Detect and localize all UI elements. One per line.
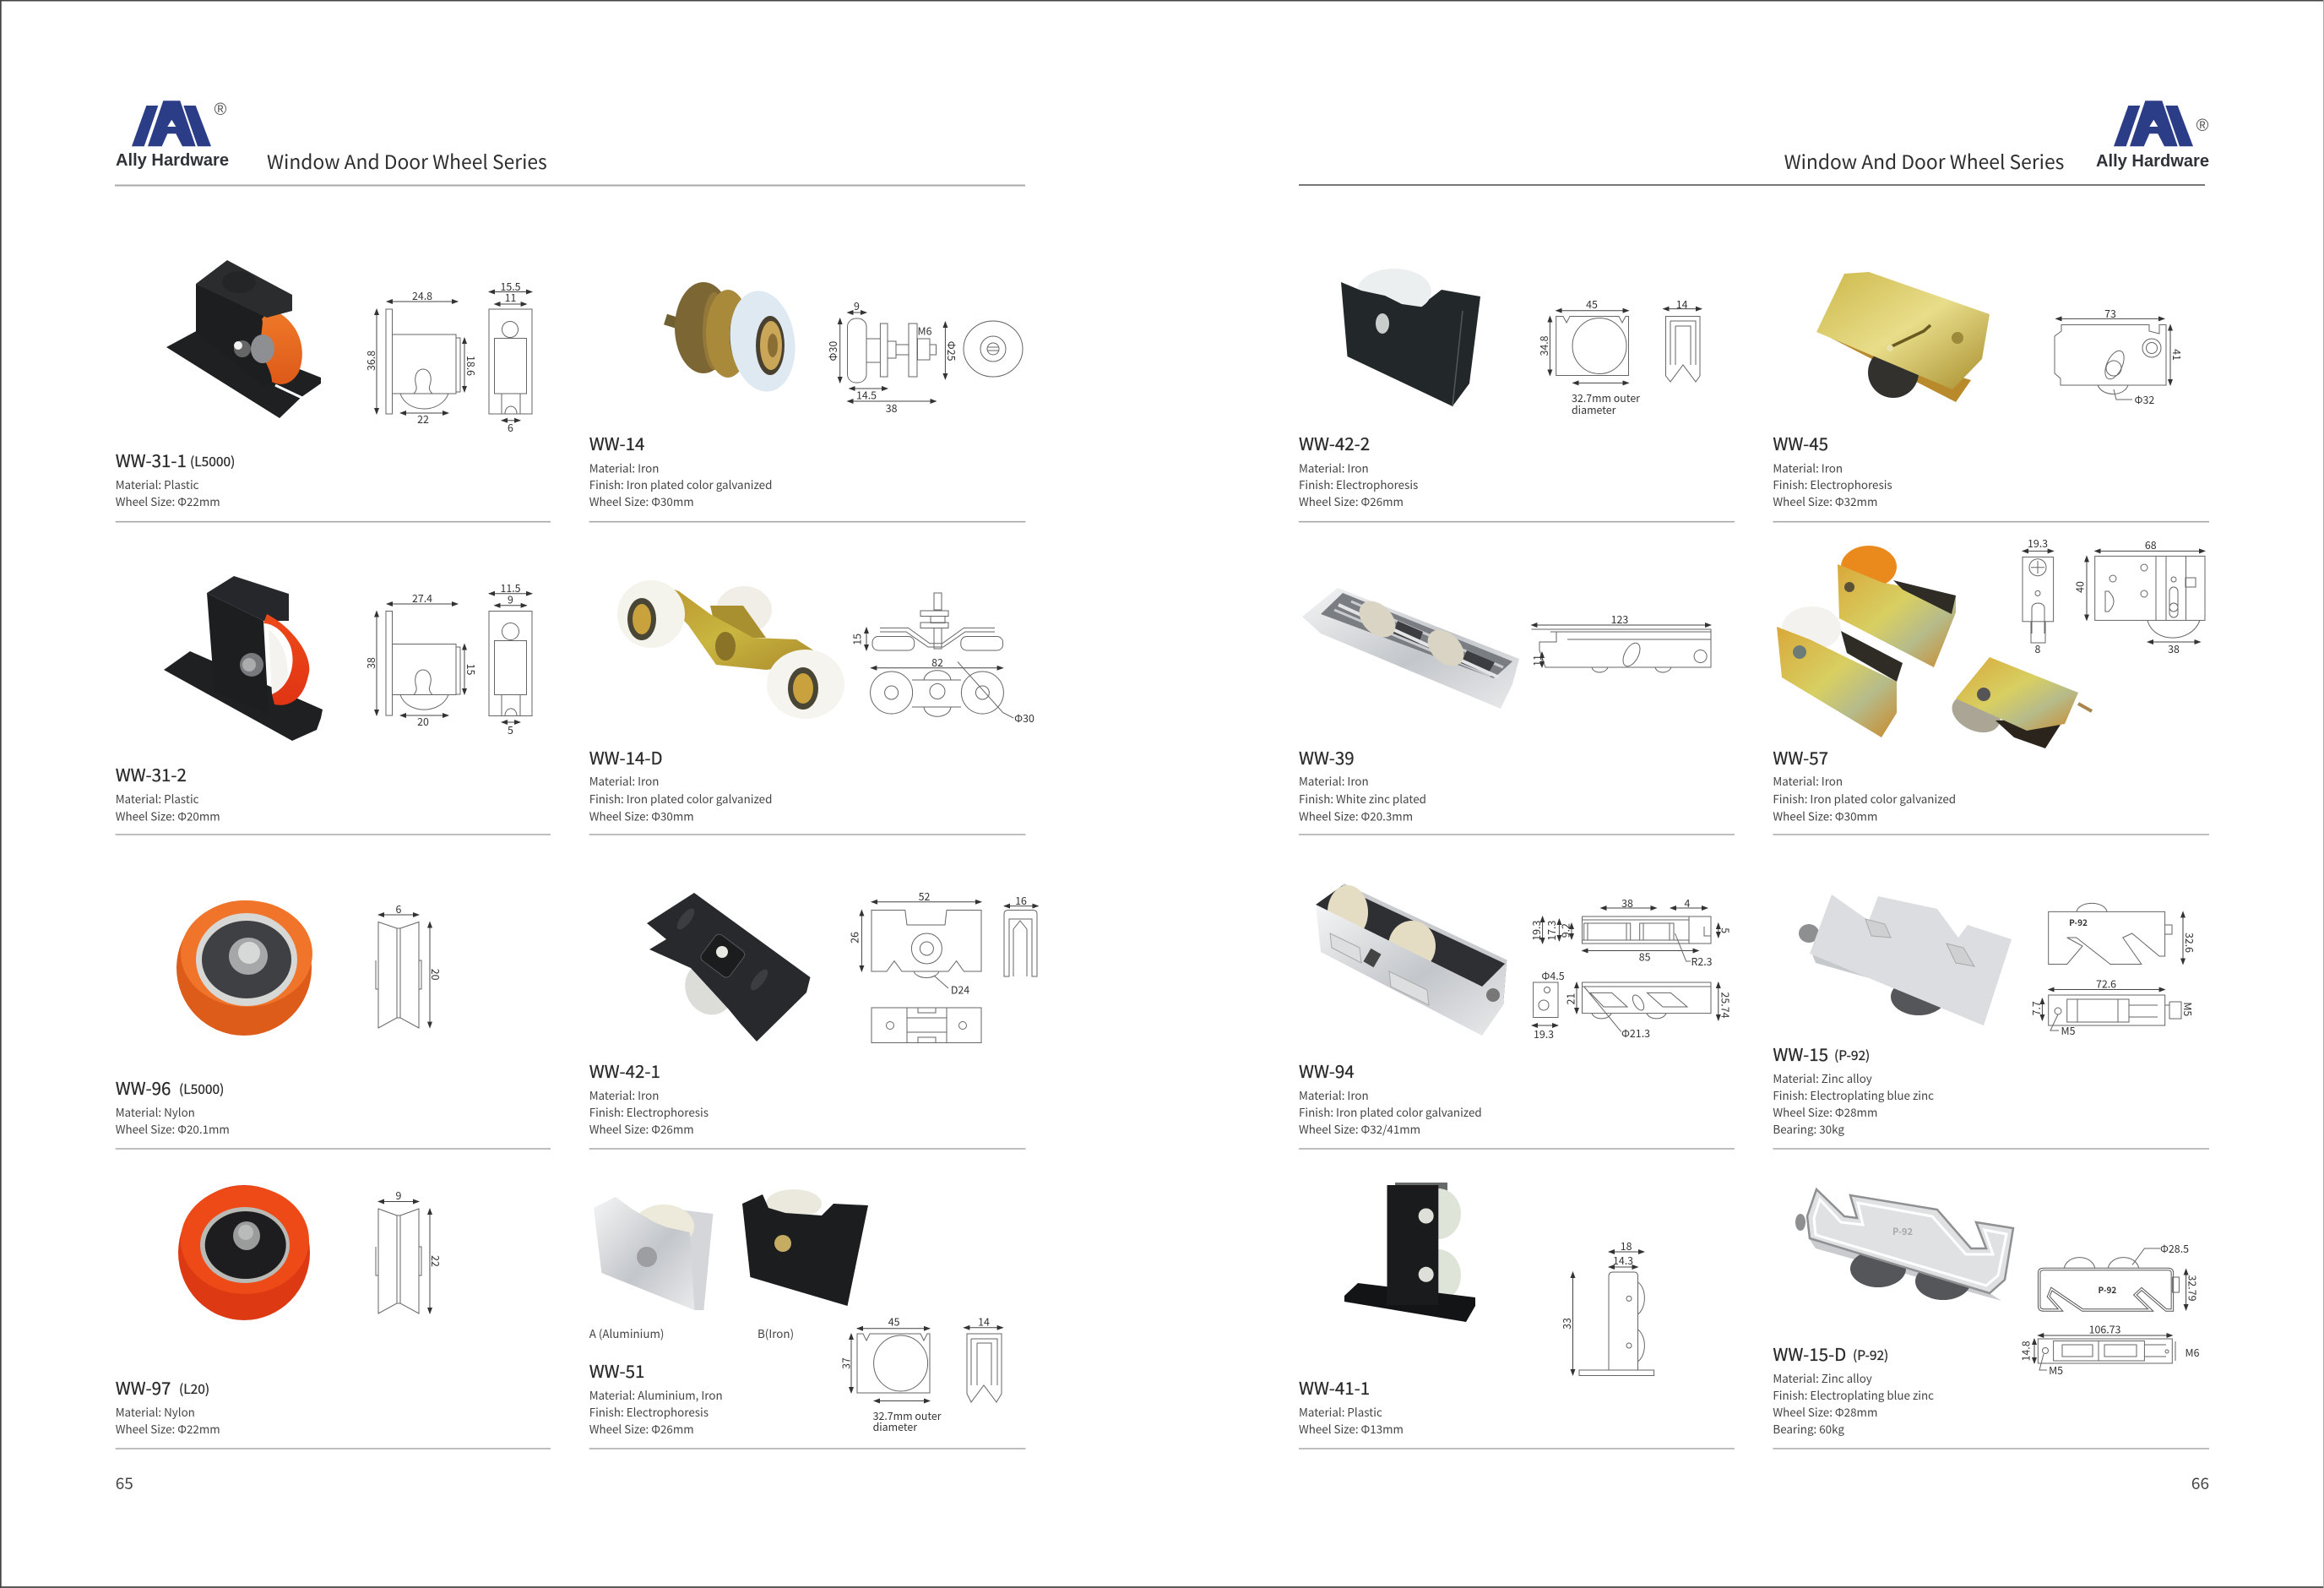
photo: WW-31-1 black plastic wheel [166, 260, 321, 418]
photo: WW-31-2 black plastic wheel [164, 576, 323, 741]
heading: WW-41-1: WW-41-1 [1299, 1374, 1370, 1400]
heading: WW-96: WW-96 [116, 1074, 171, 1100]
logo: Ally Hardware left: ® [214, 101, 227, 119]
drawing: WW-42-2 dimensions: 45 [1586, 296, 1598, 312]
drawing: WW-14-D dimensions: 15 [850, 634, 865, 645]
specs: WW-14: Finish: Iron plated color galvanized [589, 476, 772, 492]
specs: WW-15: Wheel Size: Φ28mm [1773, 1103, 1877, 1120]
specs: WW-57: Material: Iron [1773, 772, 1843, 789]
drawing: WW-31-2 dimensions: 9 [508, 591, 513, 606]
drawing: WW-14 dimensions: M6 [918, 324, 932, 339]
specs: WW-14-D: Finish: Iron plated color galvanized [589, 790, 772, 807]
heading: WW-14-D: WW-14-D [589, 744, 663, 770]
drawing: WW-96 dimensions: 6 [396, 901, 402, 916]
drawing: WW-57 front dimensions: 8 [2035, 641, 2041, 656]
specs: WW-31-1: Wheel Size: Φ22mm [116, 492, 220, 509]
drawing: WW-57 front dimensions: 19.3 [2028, 536, 2048, 551]
drawing: WW-14-D dimensions: 82 [931, 655, 943, 670]
photo: WW-14-D double wheel bracket [617, 580, 844, 719]
heading: WW-39: WW-39 [1299, 744, 1355, 770]
photo: WW-15-D twin wheel carriage [1795, 1189, 2013, 1301]
drawing: WW-97 dimensions: 9 [396, 1188, 402, 1203]
drawing: WW-57 side dimensions: 68 [2145, 537, 2157, 552]
drawing: WW-15 top dimensions: 32.6 [2182, 933, 2197, 953]
specs: WW-14-D: Material: Iron [589, 772, 659, 789]
drawing: WW-15-D bottom dimensions: M5 [2049, 1362, 2063, 1378]
heading: WW-45: WW-45 [1773, 430, 1828, 455]
specs: WW-15-D: Finish: Electroplating blue zinc [1773, 1386, 1934, 1403]
logo: Ally Hardware right: ® [2196, 117, 2209, 135]
photo: WW-97 red wheel [178, 1185, 310, 1320]
heading: WW-42-2: WW-42-2 [1299, 430, 1370, 455]
photo: WW-15 zinc alloy carriage [1799, 895, 2012, 1025]
drawing: WW-42-2 dimensions: 32.7mm outer [1572, 390, 1640, 405]
drawing: WW-42-2 dimensions: diameter [1572, 402, 1616, 417]
specs: WW-94: Material: Iron [1299, 1086, 1369, 1103]
drawing: WW-94 end and side dimensions: 21 [1563, 993, 1578, 1004]
drawing: WW-31-1 dimensions: 22 [417, 411, 429, 427]
drawing: WW-96 dimensions: 20 [428, 969, 443, 981]
panel: WW-15 [1773, 895, 2197, 1137]
specs: WW-42-2: Finish: Electrophoresis [1299, 476, 1418, 492]
drawing: WW-31-2 dimensions: 5 [508, 722, 513, 737]
heading: WW-15-D: (P-92) [1853, 1346, 1888, 1364]
drawing: WW-94 top dimensions: 85 [1639, 949, 1651, 965]
drawing: WW-42-1 dimensions: 52 [919, 889, 930, 904]
drawing: WW-94 end and side dimensions [1532, 968, 1734, 1041]
drawing: WW-15-D bottom dimensions: 14.8 [2018, 1341, 2033, 1361]
specs: WW-31-2: Material: Plastic [116, 790, 198, 807]
label: B(Iron): B(Iron) [757, 1324, 794, 1341]
specs: WW-45: Wheel Size: Φ32mm [1773, 492, 1877, 509]
drawing: WW-15-D bottom dimensions: M6 [2186, 1345, 2200, 1360]
panel: WW-14-D [589, 580, 1034, 824]
drawing: WW-15-D top dimensions [2039, 1241, 2201, 1310]
drawing: WW-51 dimensions: 45 [888, 1314, 900, 1330]
drawing: WW-14-D dimensions [850, 593, 1034, 726]
photo: WW-39 zinc double wheel carriage [1302, 588, 1519, 709]
drawing: WW-94 end and side dimensions: 25.74 [1719, 993, 1734, 1019]
specs: WW-39: Wheel Size: Φ20.3mm [1299, 808, 1413, 824]
specs: WW-42-2: Wheel Size: Φ26mm [1299, 492, 1404, 509]
drawing: WW-14 dimensions: 38 [886, 400, 898, 416]
heading: WW-42-1: WW-42-1 [589, 1058, 660, 1083]
photo: WW-41-1 black twin wheel holder [1344, 1183, 1475, 1322]
page: right, page 66 [1299, 101, 2209, 1494]
heading: WW-96: (L5000) [179, 1080, 224, 1098]
specs: WW-96: Wheel Size: Φ20.1mm [116, 1120, 230, 1137]
specs: WW-31-1: Material: Plastic [116, 476, 198, 492]
drawing: WW-15 bottom dimensions [2028, 976, 2196, 1038]
drawing: WW-94 top dimensions: 19.3 [1529, 921, 1544, 941]
drawing: WW-31-2 dimensions: 11.5 [500, 580, 521, 596]
specs: WW-94: Wheel Size: Φ32/41mm [1299, 1120, 1420, 1137]
photo: WW-15-D twin wheel carriage: P-92 [1892, 1225, 1913, 1238]
logo: Ally Hardware left: Ally Hardware [116, 151, 229, 170]
photo: WW-42-1 black iron housing [647, 893, 811, 1041]
drawing: WW-57 side dimensions [2072, 537, 2205, 656]
specs: WW-97: Wheel Size: Φ22mm [116, 1420, 220, 1437]
panel: WW-96 [116, 900, 443, 1137]
specs: WW-39: Material: Iron [1299, 772, 1369, 789]
drawing: WW-41-1 dimensions: 33 [1559, 1318, 1574, 1330]
photo: WW-57 top carriage [1838, 546, 1956, 667]
specs: WW-15-D: Material: Zinc alloy [1773, 1369, 1872, 1386]
drawing: WW-94 top dimensions [1529, 895, 1734, 969]
specs: WW-14: Material: Iron [589, 460, 659, 476]
drawing: WW-14-D dimensions: Φ30 [1014, 710, 1034, 726]
drawing: WW-15-D bottom dimensions: 106.73 [2089, 1322, 2121, 1337]
label: A (Aluminium): A (Aluminium) [589, 1324, 664, 1341]
drawing: WW-51 dimensions [838, 1314, 1003, 1434]
drawing: WW-45 dimensions: 73 [2104, 306, 2116, 321]
panel: WW-15-D [1773, 1189, 2201, 1437]
panel: WW-45 [1773, 272, 2185, 509]
drawing: WW-94 top dimensions: 9.2 [1558, 923, 1573, 938]
specs: WW-57: Finish: Iron plated color galvanized [1773, 790, 1956, 807]
heading: WW-97: (L20) [179, 1379, 209, 1398]
drawing: WW-31-1 dimensions: 6 [508, 420, 513, 435]
drawing: WW-57 side dimensions: 38 [2168, 641, 2180, 656]
drawing: WW-15-D top dimensions: 32.79 [2186, 1275, 2201, 1302]
photo: WW-51 A aluminium housing [594, 1197, 713, 1310]
drawing: WW-31-1 dimensions: 24.8 [412, 288, 432, 303]
drawing: WW-57 side dimensions: 40 [2072, 581, 2087, 593]
specs: WW-57: Wheel Size: Φ30mm [1773, 808, 1877, 824]
specs: WW-45: Finish: Electrophoresis [1773, 476, 1892, 492]
drawing: WW-42-1 dimensions [847, 889, 1038, 1042]
drawing: WW-94 top dimensions: 4 [1685, 895, 1691, 911]
drawing: WW-31-2 dimensions: 38 [363, 657, 378, 669]
page number: 65: 65 [116, 1471, 133, 1494]
photo: WW-96 orange wheel [176, 900, 312, 1036]
heading: WW-51: WW-51 [589, 1357, 644, 1383]
drawing: WW-39 dimensions [1529, 612, 1711, 672]
specs: WW-42-1: Material: Iron [589, 1086, 659, 1103]
drawing: WW-39 dimensions: 11 [1529, 655, 1545, 666]
drawing: WW-94 end and side dimensions: Φ4.5 [1541, 968, 1565, 983]
panel: WW-57 [1773, 536, 2205, 824]
drawing: WW-51 dimensions: diameter [873, 1419, 917, 1434]
drawing: WW-94 top dimensions: 5 [1719, 927, 1734, 933]
specs: WW-15: Bearing: 30kg [1773, 1120, 1844, 1137]
logo: Ally Hardware left [116, 101, 229, 170]
specs: WW-51: Wheel Size: Φ26mm [589, 1420, 694, 1437]
title: series heading left: Window And Door Wheel Series [267, 146, 547, 175]
specs: WW-15: Finish: Electroplating blue zinc [1773, 1086, 1934, 1103]
panel: WW-94 [1299, 885, 1734, 1137]
specs: WW-45: Material: Iron [1773, 460, 1843, 476]
drawing: WW-14 dimensions: 14.5 [856, 388, 877, 403]
photo: WW-14 white and brass wheel [665, 282, 801, 396]
drawing: WW-51 dimensions: 37 [838, 1357, 853, 1369]
drawing: WW-97 dimensions [376, 1188, 443, 1313]
drawing: WW-42-1 dimensions: 16 [1015, 893, 1027, 908]
drawing: WW-15-D bottom dimensions [2018, 1322, 2200, 1378]
drawing: WW-42-2 dimensions: 34.8 [1536, 335, 1551, 356]
drawing: WW-51 dimensions: 32.7mm outer [873, 1408, 942, 1423]
panel: WW-31-2 [116, 576, 532, 824]
drawing: WW-15-D top dimensions: P-92 [2098, 1283, 2116, 1296]
specs: WW-31-2: Wheel Size: Φ20mm [116, 808, 220, 824]
drawing: WW-96 dimensions [376, 901, 443, 1028]
drawing: WW-39 dimensions: 123 [1611, 612, 1628, 627]
panel: WW-39 [1299, 588, 1711, 824]
drawing: WW-31-1 dimensions: 18.6 [464, 356, 479, 376]
heading: WW-15: (P-92) [1834, 1046, 1870, 1064]
photo: WW-57 lower left carriage [1777, 606, 1903, 737]
drawing: WW-97 dimensions: 22 [428, 1255, 443, 1267]
drawing: WW-31-1 dimensions: 36.8 [363, 351, 378, 371]
drawing: WW-15 bottom dimensions: M5 [2180, 1002, 2196, 1016]
drawing: WW-31-1 dimensions: 11 [505, 290, 516, 305]
drawing: WW-15 bottom dimensions: M5 [2061, 1023, 2076, 1038]
drawing: WW-31-2 dimensions: 15 [464, 664, 479, 675]
panel: WW-42-2 [1299, 269, 1702, 509]
drawing: WW-14 dimensions: 9 [854, 298, 860, 313]
photo: WW-45 gold housing [1816, 272, 1990, 402]
photo: WW-94 double wheel carriage [1316, 885, 1507, 1036]
drawing: WW-45 dimensions: Φ32 [2135, 392, 2154, 407]
panel: WW-41-1 [1299, 1183, 1654, 1437]
drawing: WW-14 dimensions: Φ30 [825, 341, 840, 361]
specs: WW-15-D: Wheel Size: Φ28mm [1773, 1403, 1877, 1420]
heading: WW-15: WW-15 [1773, 1041, 1828, 1066]
page number: 66: 66 [2191, 1471, 2209, 1494]
heading: WW-14: WW-14 [589, 430, 644, 455]
heading: WW-57: WW-57 [1773, 744, 1828, 770]
drawing: WW-15 top dimensions [2049, 903, 2197, 965]
drawing: WW-94 end and side dimensions: 19.3 [1534, 1026, 1554, 1041]
drawing: WW-45 dimensions: 41 [2169, 349, 2185, 361]
drawing: WW-42-2 dimensions [1536, 296, 1702, 417]
specs: WW-51: Material: Aluminium, Iron [589, 1386, 723, 1403]
drawing: WW-94 top dimensions: 17.3 [1544, 921, 1559, 941]
logo: Ally Hardware right: Ally Hardware [2096, 152, 2209, 171]
drawing: WW-94 top dimensions: 38 [1621, 895, 1633, 911]
logo: Ally Hardware right [2096, 101, 2209, 171]
drawing: WW-42-2 dimensions: 14 [1676, 296, 1688, 312]
specs: WW-94: Finish: Iron plated color galvanized [1299, 1103, 1482, 1120]
drawing: WW-15 top dimensions: P-92 [2069, 916, 2088, 928]
heading: WW-97: WW-97 [116, 1374, 171, 1400]
heading: WW-31-1: (L5000) [190, 452, 235, 470]
drawing: WW-15 bottom dimensions: 7.7 [2028, 1001, 2044, 1015]
title: series heading right: Window And Door Wheel Series [1784, 146, 2064, 175]
drawing: WW-51 dimensions: 14 [978, 1314, 990, 1330]
specs: WW-41-1: Material: Plastic [1299, 1403, 1382, 1420]
panel: WW-51 [589, 1189, 1003, 1437]
heading: WW-31-1: WW-31-1 [116, 447, 187, 472]
drawing: WW-15-D top dimensions: Φ28.5 [2160, 1241, 2189, 1256]
heading: WW-94: WW-94 [1299, 1058, 1355, 1083]
drawing: WW-41-1 dimensions: 14.3 [1613, 1253, 1633, 1268]
specs: WW-42-1: Wheel Size: Φ26mm [589, 1120, 694, 1137]
heading: WW-31-2: WW-31-2 [116, 761, 187, 786]
photo: WW-51 B iron housing [742, 1189, 868, 1306]
specs: WW-51: Finish: Electrophoresis [589, 1403, 709, 1420]
drawing: WW-15 bottom dimensions: 72.6 [2096, 976, 2116, 992]
drawing: WW-94 end and side dimensions: Φ21.3 [1621, 1025, 1650, 1041]
drawing: WW-31-2 dimensions: 27.4 [412, 590, 432, 606]
drawing: WW-31-2 dimensions [363, 580, 532, 737]
drawing: WW-31-1 dimensions [363, 279, 532, 435]
page: left, page 65 [115, 101, 1038, 1494]
specs: WW-14: Wheel Size: Φ30mm [589, 492, 694, 509]
specs: WW-15-D: Bearing: 60kg [1773, 1420, 1844, 1437]
drawing: WW-57 front dimensions [2023, 536, 2054, 656]
drawing: WW-41-1 dimensions [1559, 1238, 1654, 1375]
drawing: WW-94 top dimensions: R2.3 [1691, 954, 1713, 969]
specs: WW-96: Material: Nylon [116, 1103, 195, 1120]
panel: WW-14 [589, 282, 1023, 509]
specs: WW-41-1: Wheel Size: Φ13mm [1299, 1420, 1404, 1437]
drawing: WW-14 dimensions [825, 298, 1023, 416]
specs: WW-14-D: Wheel Size: Φ30mm [589, 808, 694, 824]
drawing: WW-31-2 dimensions: 20 [417, 714, 429, 729]
drawing: WW-45 dimensions [2055, 306, 2185, 407]
photo: WW-57 lower right carriage [1946, 657, 2092, 748]
specs: WW-39: Finish: White zinc plated [1299, 790, 1426, 807]
panel: WW-31-1 [116, 260, 532, 509]
drawing: WW-14 dimensions: Φ25 [944, 341, 959, 362]
drawing: WW-42-1 dimensions: D24 [951, 982, 969, 997]
panel: WW-97 [116, 1185, 443, 1437]
specs: WW-42-2: Material: Iron [1299, 460, 1369, 476]
specs: WW-42-1: Finish: Electrophoresis [589, 1103, 709, 1120]
drawing: WW-41-1 dimensions: 18 [1621, 1238, 1632, 1254]
drawing: WW-31-1 dimensions: 15.5 [500, 279, 521, 294]
specs: WW-15: Material: Zinc alloy [1773, 1069, 1872, 1086]
specs: WW-97: Material: Nylon [116, 1403, 195, 1420]
photo: WW-42-2 black housing [1341, 269, 1480, 406]
drawing: WW-42-1 dimensions: 26 [847, 932, 862, 944]
panel: WW-42-1 [589, 889, 1038, 1137]
heading: WW-15-D: WW-15-D [1773, 1341, 1846, 1366]
